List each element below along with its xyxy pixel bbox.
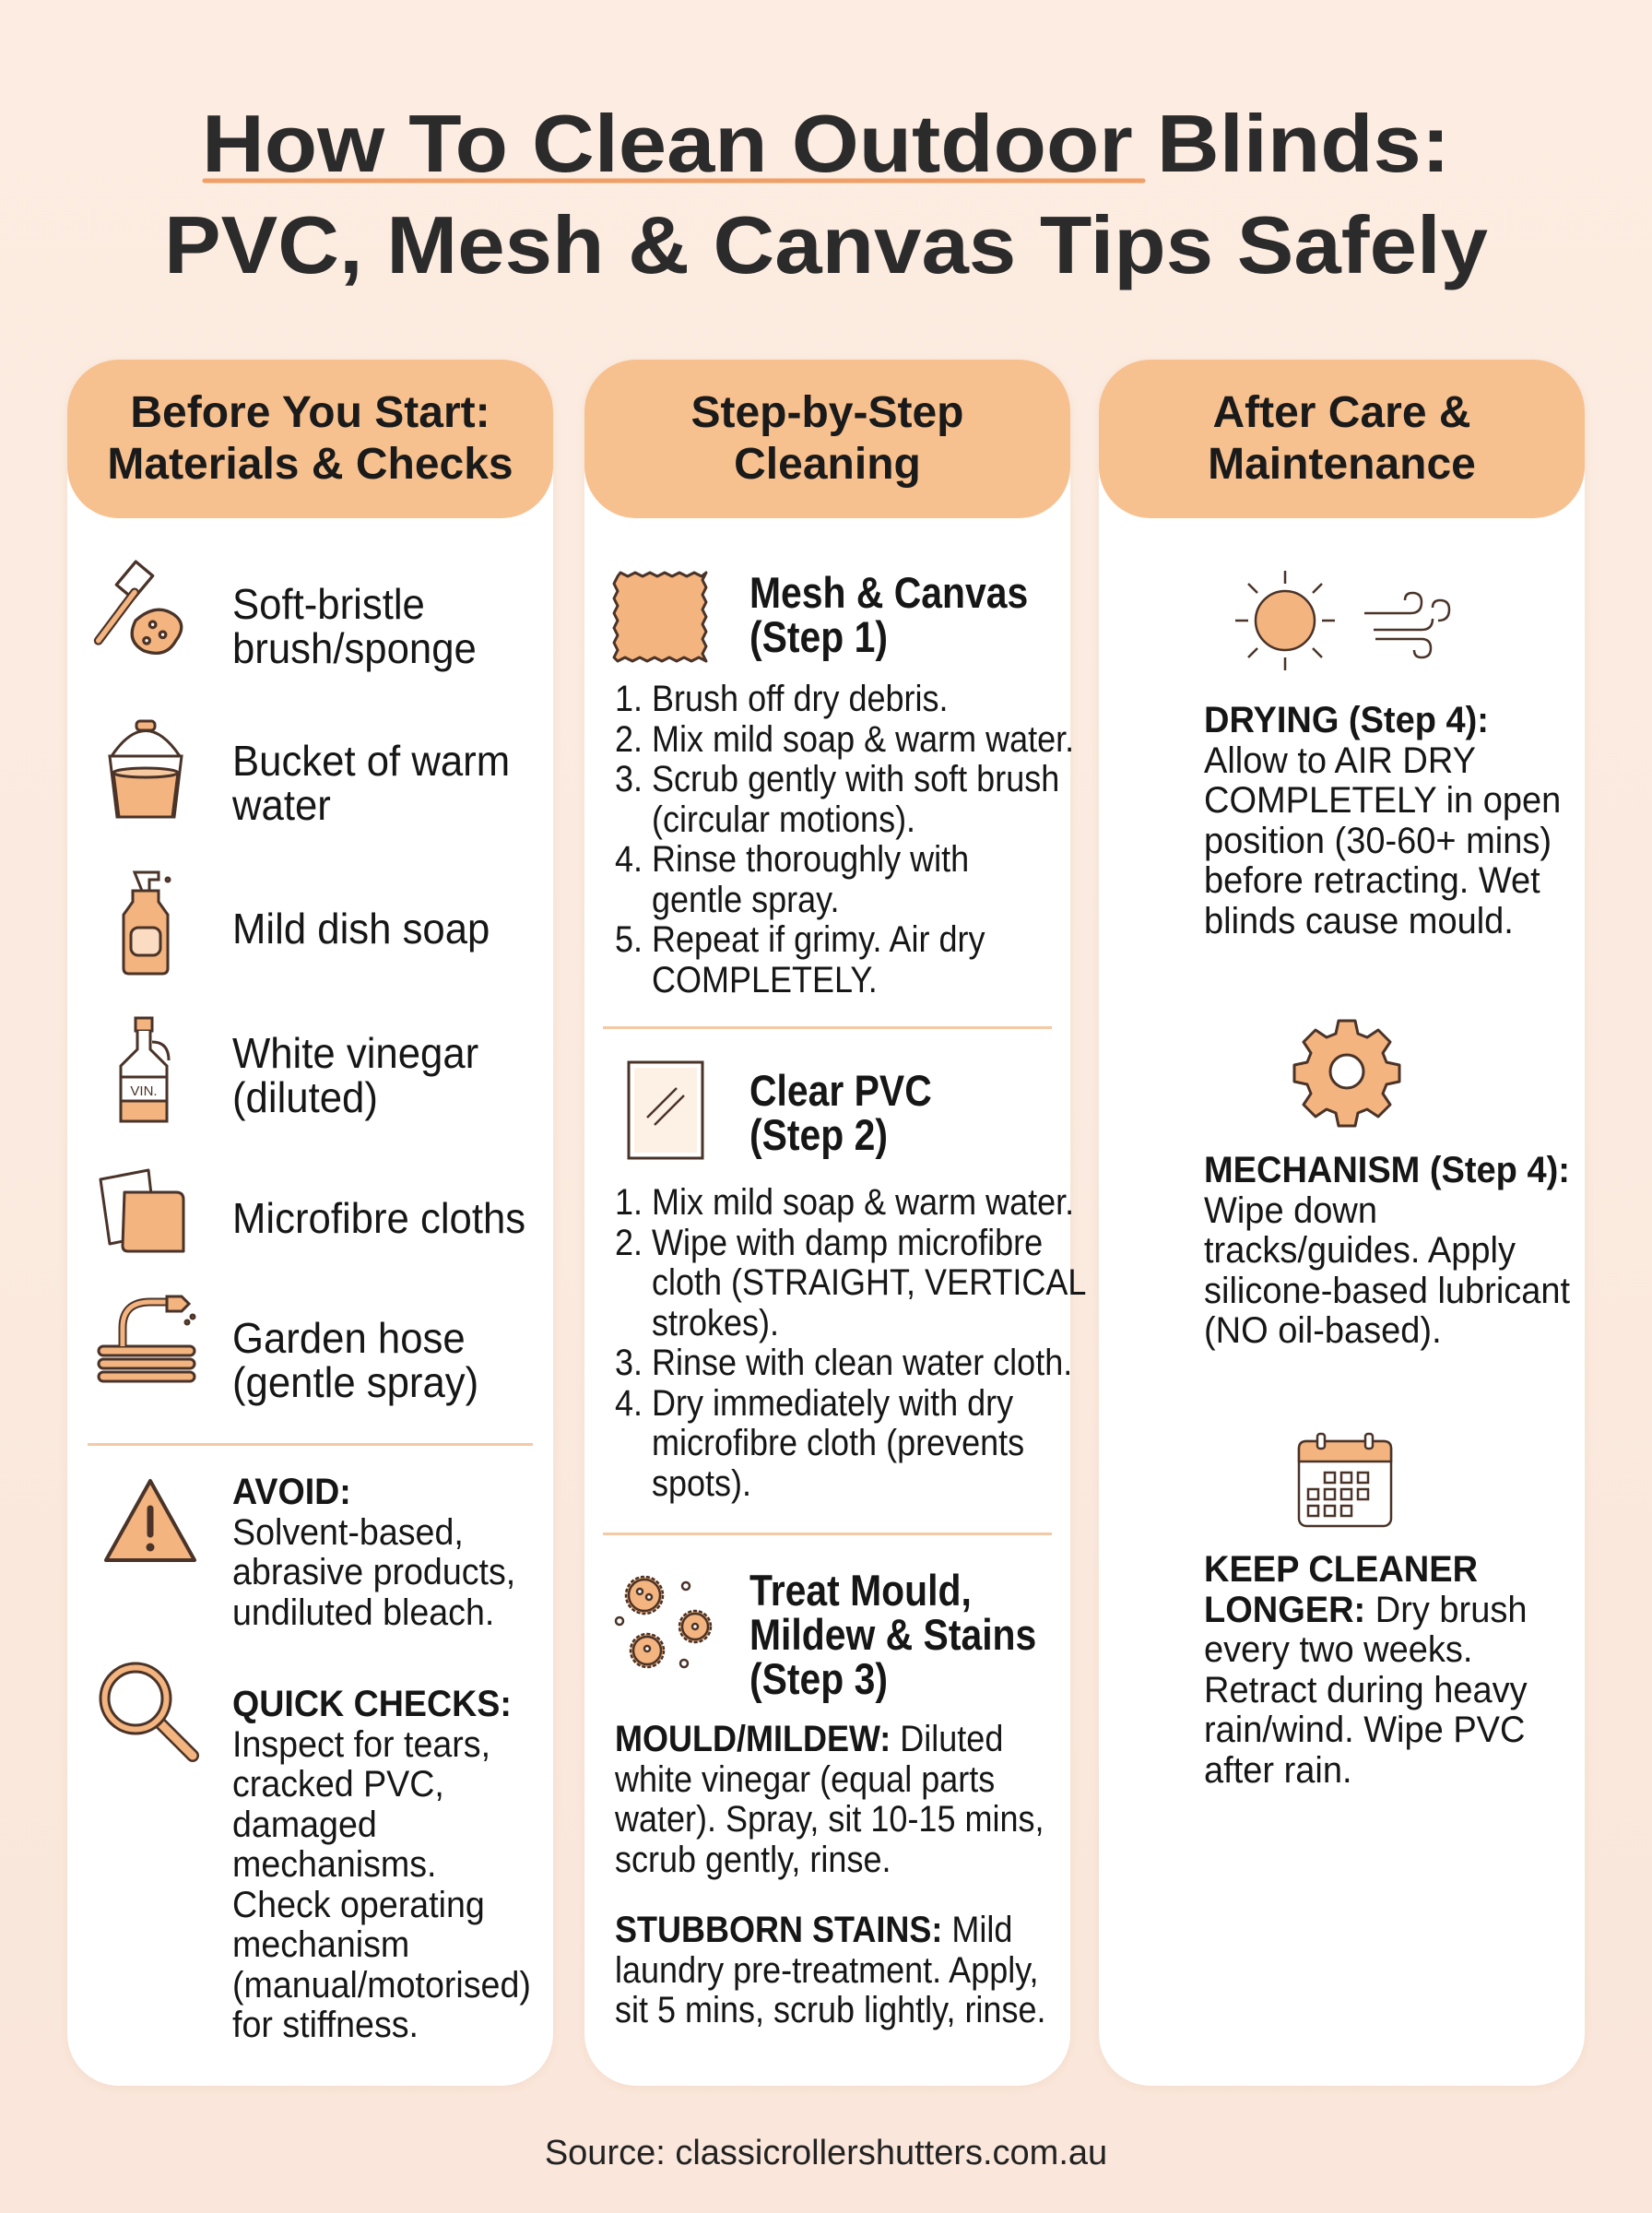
heading: after care: After Care & [1212,388,1471,437]
icon: vinegar bottle: VIN. [130,1083,158,1099]
heading: before you start: Before You Start: [130,388,490,437]
heading: mesh & canvas [749,568,1028,661]
list: step 2: 4. Dry immediately with dry [615,1383,1013,1424]
text: avoid [232,1472,515,1632]
text: mild dish soap: Mild dish soap [232,905,490,953]
text: white vinegar: White vinegar [232,1029,478,1077]
text: stubborn stains [615,1910,1045,2030]
list: step 1: 2. Mix mild soap & warm water. [615,719,1074,760]
text: quick checks: for stiffness. [232,2005,419,2045]
list: step 2: spots). [652,1462,751,1503]
text: quick checks: Check operating [232,1885,485,1925]
text: avoid: undiluted bleach. [232,1592,494,1632]
text: mechanism: (NO oil-based). [1204,1310,1442,1351]
text: mechanism [1204,1150,1570,1351]
panel: before you start [67,360,553,2086]
list: step 1: (circular motions). [652,799,915,839]
text: keep cleaner longer: Retract during heavy [1204,1669,1528,1710]
list: step 2: strokes). [652,1302,779,1343]
icon: soap bottle [122,870,171,976]
heading: before you start [67,360,553,518]
icon: mould spores [614,1575,712,1669]
icon: vinegar bottle [120,1016,170,1123]
text: mechanism: Wipe down [1204,1189,1377,1230]
text: drying: position (30-60+ mins) [1204,821,1552,861]
text: bucket: Bucket of warm [232,737,510,785]
text: mould/mildew: scrub gently, rinse. [615,1839,891,1879]
heading: mesh & canvas: Mesh & Canvas [749,568,1028,617]
text: mechanism: silicone-based lubricant [1204,1271,1570,1311]
text: quick checks [232,1684,531,2045]
text: drying: Allow to AIR DRY [1204,740,1476,780]
list: step 2 [615,1182,1086,1503]
panel: step-by-step cleaning [584,360,1070,2086]
title [164,98,1488,290]
text: drying: COMPLETELY in open [1204,780,1561,821]
text: quick checks: mechanism [232,1924,409,1965]
heading: before you start: Materials & Checks [107,440,513,489]
panel: after care [1099,360,1585,2086]
heading: treat mould [749,1566,1036,1703]
icon: garden hose [98,1295,195,1383]
heading: step-by-step [584,360,1070,518]
text: soft-bristle [232,580,477,672]
text: keep cleaner longer: LONGER: Dry brush [1204,1590,1527,1630]
list: step 2: 3. Rinse with clean water cloth. [615,1343,1072,1383]
text: white vinegar [232,1029,478,1121]
heading: mesh & canvas: (Step 1) [749,612,888,661]
text: keep cleaner longer [1204,1549,1528,1791]
text: soft-bristle: Soft-bristle [232,580,425,628]
text: stubborn stains: sit 5 mins, scrub lightly, rinse. [615,1990,1045,2030]
heading: treat mould: (Step 3) [749,1654,888,1703]
icon: clear pvc [627,1060,704,1160]
text: drying [1204,700,1561,941]
text: mould/mildew: MOULD/MILDEW: Diluted [615,1719,1003,1759]
icon: bucket [108,719,183,819]
list: step 1: 1. Brush off dry debris. [615,679,949,719]
text: bucket [232,737,510,829]
text: mechanism: tracks/guides. Apply [1204,1230,1516,1271]
list: step 2: microfibre cloth (prevents [652,1423,1024,1463]
text: avoid: abrasive products, [232,1552,515,1592]
source footer: Source: classicrollershutters.com.au [545,2134,1107,2172]
text: keep cleaner longer: after rain. [1204,1750,1352,1791]
list: step 2: cloth (STRAIGHT, VERTICAL [652,1262,1086,1303]
text: keep cleaner longer: every two weeks. [1204,1629,1472,1670]
icon: cloths [100,1169,184,1252]
text: microfibre cloths: Microfibre cloths [232,1194,525,1242]
list: step 1 [615,679,1074,1000]
text: white vinegar: (diluted) [232,1073,378,1121]
title: PVC, Mesh & Canvas Tips Safely [164,199,1488,290]
text: quick checks: Inspect for tears, [232,1724,490,1765]
icon: brush and sponge [94,560,183,655]
text: stubborn stains: laundry pre-treatment. Apply, [615,1949,1039,1990]
list: step 1: 5. Repeat if grimy. Air dry [615,919,985,960]
icon: gear [1292,1020,1401,1127]
list: step 1: 3. Scrub gently with soft brush [615,759,1059,799]
text: mechanism: MECHANISM (Step 4): [1204,1150,1570,1190]
text: stubborn stains: STUBBORN STAINS: Mild [615,1910,1012,1950]
text: avoid: AVOID: [232,1472,351,1512]
text: garden hose: (gentle spray) [232,1358,478,1406]
text: keep cleaner longer: KEEP CLEANER [1204,1549,1478,1590]
icon: calendar [1298,1433,1392,1527]
list: step 1: gentle spray. [652,880,839,920]
text: garden hose: Garden hose [232,1314,466,1362]
text: mould/mildew [615,1719,1044,1879]
list: step 1: 4. Rinse thoroughly with [615,839,969,880]
text: bucket: water [232,781,331,829]
text: avoid: Solvent-based, [232,1512,464,1553]
text: quick checks: cracked PVC, [232,1764,444,1805]
list: step 2: 1. Mix mild soap & warm water. [615,1182,1074,1223]
text: soft-bristle: brush/sponge [232,624,477,672]
icon: sun and wind [1235,571,1451,670]
heading: after care [1099,360,1585,518]
text: garden hose [232,1314,478,1406]
text: quick checks: mechanisms. [232,1844,436,1885]
list: step 1: COMPLETELY. [652,959,878,1000]
list: step 2: 2. Wipe with damp microfibre [615,1223,1043,1263]
heading: treat mould: Mildew & Stains [749,1610,1036,1659]
text: keep cleaner longer: rain/wind. Wipe PVC [1204,1710,1525,1750]
icon: warning [104,1479,197,1562]
heading: clear pvc [749,1066,932,1159]
heading: step-by-step: Step-by-Step [690,388,964,437]
heading: step-by-step: Cleaning [734,440,921,489]
text: mould/mildew: white vinegar (equal parts [615,1759,995,1800]
text: drying: before retracting. Wet [1204,860,1540,901]
heading: clear pvc: (Step 2) [749,1110,888,1159]
icon: mesh fabric [612,571,708,662]
text: drying: DRYING (Step 4): [1204,700,1489,740]
heading: clear pvc: Clear PVC [749,1066,932,1115]
heading: treat mould: Treat Mould, [749,1566,972,1615]
text: quick checks: (manual/motorised) [232,1964,531,2005]
title: How To Clean Outdoor Blinds: [202,98,1450,189]
text: drying: blinds cause mould. [1204,900,1514,941]
text: mould/mildew: water). Spray, sit 10-15 mins, [615,1799,1044,1840]
heading: after care: Maintenance [1208,440,1476,489]
icon: magnifier [100,1662,199,1762]
text: quick checks: damaged [232,1804,377,1844]
text: quick checks: QUICK CHECKS: [232,1684,512,1724]
